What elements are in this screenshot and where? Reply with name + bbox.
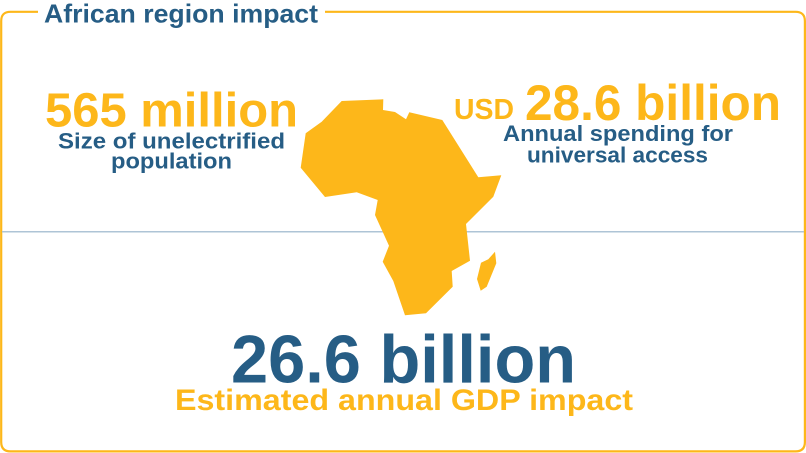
stat: GDP impact	[175, 321, 633, 417]
stat: GDP impact: Estimated annual GDP impact	[175, 384, 633, 417]
stat: annual spending: Annual spending for	[503, 121, 733, 146]
stat: annual spending: 28.6 billion	[525, 75, 781, 131]
stat: unelectrified population: population	[111, 148, 232, 174]
stat: unelectrified population: 565 million	[45, 84, 298, 138]
stat: annual spending: universal access	[527, 142, 708, 167]
stat: GDP impact: 26.6 billion	[231, 321, 576, 397]
icon: map of Africa	[301, 99, 501, 315]
stat: unelectrified population	[45, 84, 298, 174]
stat: annual spending: USD	[454, 94, 514, 126]
stat: annual spending	[454, 75, 781, 167]
stat: unelectrified population: Size of unelectrified	[58, 128, 285, 153]
